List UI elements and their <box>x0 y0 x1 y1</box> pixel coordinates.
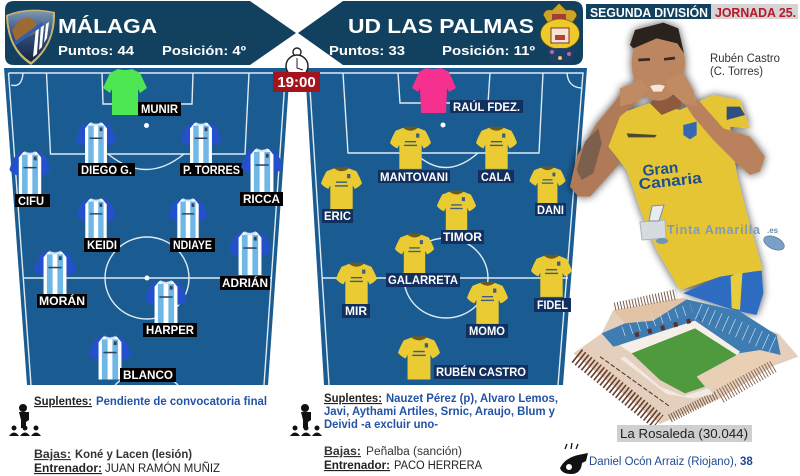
player: Blanco <box>89 336 176 382</box>
player: Mantovani: MANTOVANI <box>380 172 448 184</box>
panel: Málaga pitch <box>4 68 290 385</box>
illustration: La Rosaleda stadium <box>573 295 798 424</box>
player: Morán: MORÁN <box>39 295 85 308</box>
player: Fidel <box>531 254 572 312</box>
photo: Rubén Castro celebrating: Gran <box>642 159 679 180</box>
text: Las Palmas substitutes: Suplentes: <box>324 393 382 405</box>
player: Momo: MOMO <box>469 326 505 338</box>
text: Las Palmas substitutes <box>324 393 558 431</box>
player: Keidi <box>76 198 120 252</box>
player: Mir <box>336 262 377 318</box>
player: Cala: CALA <box>481 172 511 184</box>
icon: substitutes bench (Málaga) <box>9 404 41 436</box>
player: Adrián: ADRIÁN <box>222 277 268 290</box>
player: Timor <box>437 190 484 244</box>
player: Ndiaye: NDIAYE <box>173 240 212 252</box>
player: Cifu <box>9 151 51 208</box>
kickoff time <box>273 72 320 92</box>
watermark: Tinta Amarilla: .es <box>767 226 779 235</box>
text: Las Palmas coach: PACO HERRERA <box>394 460 482 472</box>
player: Raúl Fdez. <box>412 68 523 114</box>
referee: 38 <box>740 456 753 468</box>
caption: Rubén Castro <box>710 53 780 78</box>
player: Cala <box>476 126 517 184</box>
text: Las Palmas substitutes: Nauzet Pérez (p), Alvaro Lemos, <box>386 393 558 405</box>
competition banner: JORNADA 25. <box>715 6 796 20</box>
text: Las Palmas absences <box>324 446 462 458</box>
player: Rubén Castro: RUBÉN CASTRO <box>436 366 526 379</box>
kickoff time: 19:00 <box>277 74 316 91</box>
heading: UD Las Palmas: UD LAS PALMAS <box>348 15 534 38</box>
player: Ricca: RICCA <box>243 194 280 206</box>
panel: Málaga header <box>5 1 296 65</box>
text: Las Palmas position: Posición: 11º <box>442 43 535 58</box>
heading: Málaga: MÁLAGA <box>58 15 157 38</box>
text: Málaga substitutes: Pendiente de convocatoria final <box>96 396 267 408</box>
player: Mir: MIR <box>345 306 368 318</box>
player: Eric <box>321 167 362 223</box>
caption: Rubén Castro: Rubén Castro <box>710 53 780 65</box>
player: Keidi: KEIDI <box>87 240 117 252</box>
text: Las Palmas coach: Entrenador: <box>324 460 390 472</box>
player: P. Torres <box>180 122 243 177</box>
icon: Málaga crest <box>6 10 55 65</box>
panel: Las Palmas pitch <box>305 68 587 385</box>
text: Las Palmas absences: Peñalba (sanción) <box>366 446 462 458</box>
player: Ndiaye <box>168 198 215 252</box>
text: Las Palmas absences: Bajas: <box>324 446 361 458</box>
text: Málaga coach: JUAN RAMÓN MUÑIZ <box>105 462 220 475</box>
competition banner: SEGUNDA DIVISIÓN <box>590 5 708 20</box>
player: Dani: DANI <box>537 205 564 217</box>
referee: Daniel Ocón Arraiz (Riojano), <box>589 456 737 468</box>
text: Las Palmas substitutes: Javi, Aythami Artiles, Srnic, Araujo, Blum y <box>324 406 556 418</box>
player: Dani <box>529 166 566 217</box>
icon: Las Palmas crest <box>540 3 580 63</box>
player: Harper: HARPER <box>146 325 195 337</box>
icon: whistle <box>560 443 588 474</box>
player: Adrián <box>220 231 271 290</box>
text: Las Palmas points: Puntos: 33 <box>329 43 405 58</box>
player: Galarreta: GALARRETA <box>388 275 458 287</box>
player: Ricca <box>240 148 283 206</box>
text: Las Palmas coach <box>324 460 482 472</box>
panel: Las Palmas header <box>298 1 583 65</box>
player: Morán <box>34 251 87 308</box>
player: Fidel: FIDEL <box>537 300 568 312</box>
player: Eric: ERIC <box>324 211 351 223</box>
icon: substitutes bench (Las Palmas) <box>290 404 322 436</box>
player: Blanco: BLANCO <box>123 370 173 382</box>
player: Raúl Fdez.: RAÚL FDEZ. <box>453 101 520 114</box>
player: Diego G.: DIEGO G. <box>81 165 132 177</box>
player: Diego G. <box>76 122 135 177</box>
player: Galarreta <box>386 233 460 287</box>
player: Mantovani <box>378 126 450 184</box>
text: Málaga substitutes: Suplentes: <box>34 396 92 408</box>
stadium name: La Rosaleda (30.044) <box>620 426 748 441</box>
photo: Rubén Castro celebrating: Canaria <box>638 170 703 193</box>
player: Munir <box>103 69 181 116</box>
player: P. Torres: P. TORRES <box>183 165 240 177</box>
text: Málaga absences: Bajas: <box>34 449 71 461</box>
text: Málaga coach <box>34 462 220 475</box>
text: Málaga points: Puntos: 44 <box>58 43 135 58</box>
player: Timor: TIMOR <box>443 232 483 244</box>
player: Harper <box>143 280 197 337</box>
watermark: Tinta Amarilla: Tinta Amarilla <box>667 223 761 237</box>
watermark: Tinta Amarilla <box>640 205 787 253</box>
text: Málaga absences: Koné y Lacen (lesión) <box>75 449 192 461</box>
competition banner <box>586 4 798 20</box>
player: Rubén Castro <box>398 336 528 379</box>
icon: stopwatch <box>286 48 308 77</box>
player: Momo <box>466 281 508 338</box>
photo: Rubén Castro celebrating <box>570 23 765 315</box>
caption: Rubén Castro: (C. Torres) <box>710 66 763 78</box>
player: Cifu: CIFU <box>18 196 44 208</box>
text: Las Palmas substitutes: Deivid -a excluir uno- <box>324 419 438 431</box>
player: Munir: MUNIR <box>141 104 179 116</box>
text: Málaga position: Posición: 4º <box>162 43 246 58</box>
text: Málaga coach: Entrenador: <box>34 463 102 475</box>
